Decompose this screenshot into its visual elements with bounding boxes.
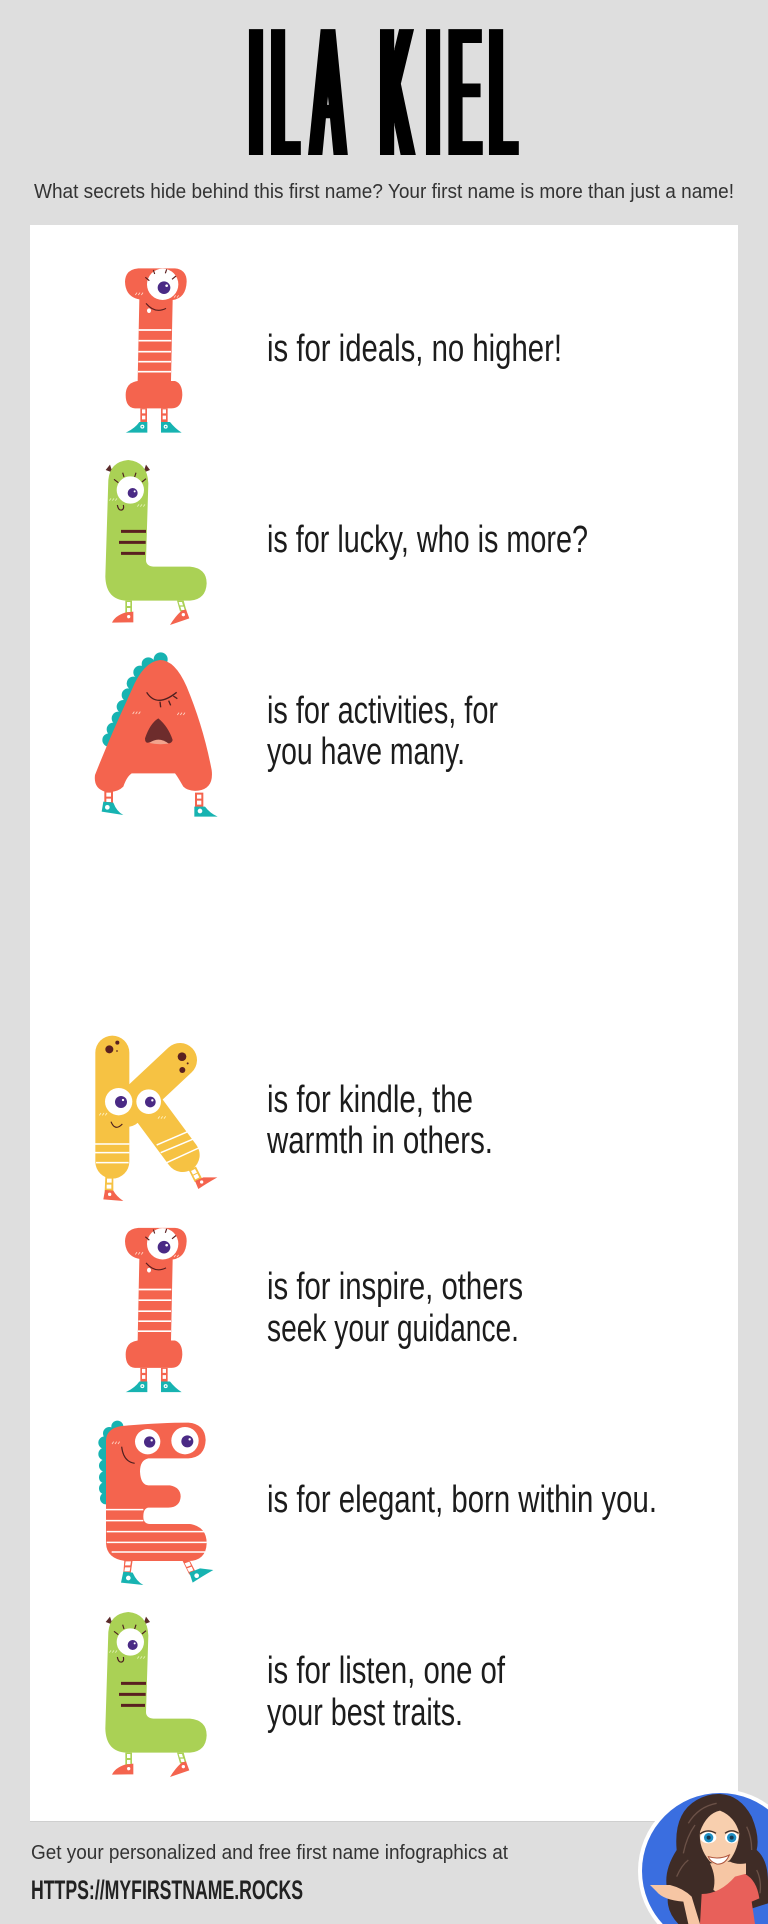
avatar: woman in blue circle bbox=[638, 1789, 768, 1924]
text: second I lines bbox=[267, 1266, 523, 1350]
panel: white card bbox=[30, 225, 738, 1822]
icon: second letter L monster bbox=[105, 1612, 207, 1777]
text: K lines: is for kindle, the bbox=[267, 1079, 473, 1121]
icon: letter I monster bbox=[125, 268, 187, 433]
text: A lines: is for activities, for bbox=[267, 690, 498, 732]
text: second L lines: is for listen, one of bbox=[267, 1650, 505, 1692]
text: second I lines: seek your guidance. bbox=[267, 1308, 519, 1350]
text: K lines: warmth in others. bbox=[266, 1120, 493, 1162]
text: second I lines: is for inspire, others bbox=[267, 1266, 523, 1308]
footer text: Get your personalized and free first name infographics at bbox=[31, 1842, 508, 1864]
icon: letter A monster bbox=[95, 652, 218, 817]
text: second L lines bbox=[267, 1650, 505, 1734]
text: E line: is for elegant, born within you. bbox=[267, 1479, 657, 1521]
footer url: HTTPS://MYFIRSTNAME.ROCKS bbox=[31, 1875, 303, 1905]
icon: letter E monster bbox=[98, 1421, 213, 1585]
text: K lines bbox=[266, 1079, 493, 1162]
subtitle: What secrets hide behind this first name? Your first name is more than just a name! bbox=[34, 181, 734, 203]
text: A lines bbox=[267, 690, 498, 773]
icon: letter K monster bbox=[95, 1041, 217, 1201]
icon: second letter I monster bbox=[125, 1228, 187, 1392]
text: I line: is for ideals, no higher! bbox=[267, 328, 562, 370]
text: second L lines: your best traits. bbox=[267, 1692, 463, 1734]
text: L line: is for lucky, who is more? bbox=[267, 519, 588, 561]
icon: letter L monster bbox=[105, 460, 207, 625]
text: A lines: you have many. bbox=[267, 731, 465, 773]
